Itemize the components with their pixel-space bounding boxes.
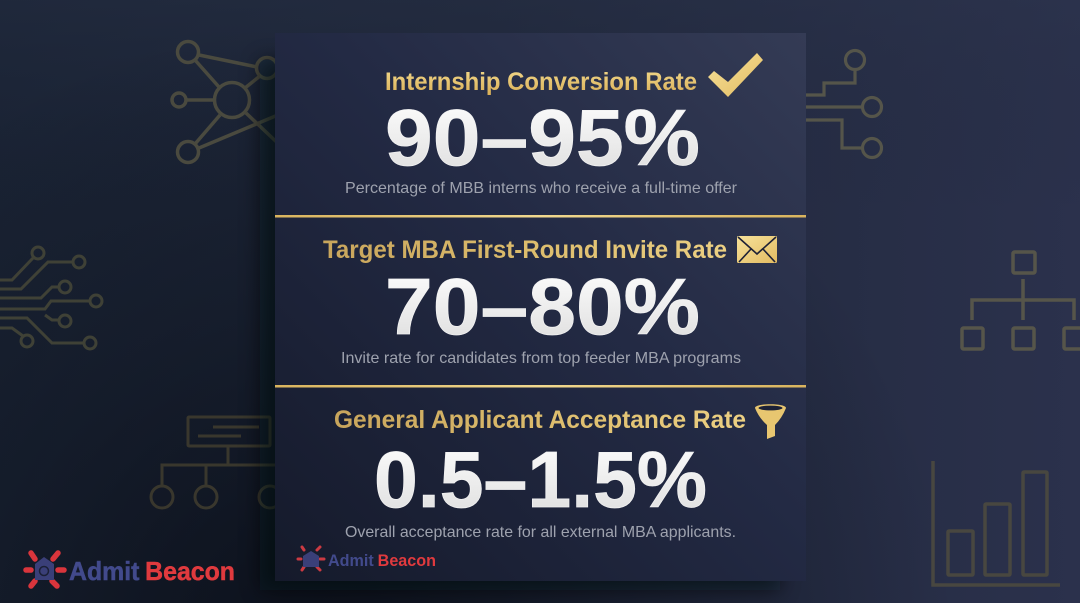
wordmark large: AdmitBeacon (69, 556, 235, 586)
logo: Admit Beacon large (26, 553, 235, 586)
icon: beacon small (298, 547, 324, 570)
icon: bar chart (933, 461, 1060, 585)
icon: envelope (737, 236, 777, 263)
section: first-round invite (323, 236, 777, 367)
icon: funnel (755, 404, 786, 439)
icon: org chart right (962, 252, 1080, 349)
divider one (275, 215, 806, 218)
icon: hierarchy with text box (151, 417, 281, 508)
icon: check mark (708, 53, 763, 97)
caption: MBB interns: Percentage of MBB interns who receive a full-time offer (345, 180, 738, 197)
section: general acceptance (334, 404, 786, 541)
number: 0.5-1.5%: 0.5–1.5% (374, 435, 707, 524)
heading: general acceptance rate: General Applicant Acceptance Rate (334, 406, 746, 434)
panel shadow (260, 60, 780, 590)
logo: Admit Beacon small (298, 547, 436, 570)
wordmark small: AdmitBeacon (328, 552, 436, 570)
icon: circuit left (0, 247, 102, 349)
panel: rates card (275, 33, 806, 581)
caption: external applicants: Overall acceptance rate for all external MBA applicants. (345, 524, 736, 541)
section: internship conversion (345, 53, 763, 197)
divider two (275, 385, 806, 388)
icon: circuit right (800, 50, 882, 158)
icon: network graph (172, 42, 285, 162)
icon: beacon large (26, 553, 64, 586)
heading: internship conversion rate: Internship Conversion Rate (385, 68, 697, 96)
number: 70-80%: 70–80% (385, 262, 700, 351)
heading: target MBA invite rate: Target MBA First-Round Invite Rate (323, 236, 727, 264)
caption: feeder programs: Invite rate for candidates from top feeder MBA programs (341, 350, 741, 367)
number: 90-95%: 90–95% (385, 93, 700, 182)
